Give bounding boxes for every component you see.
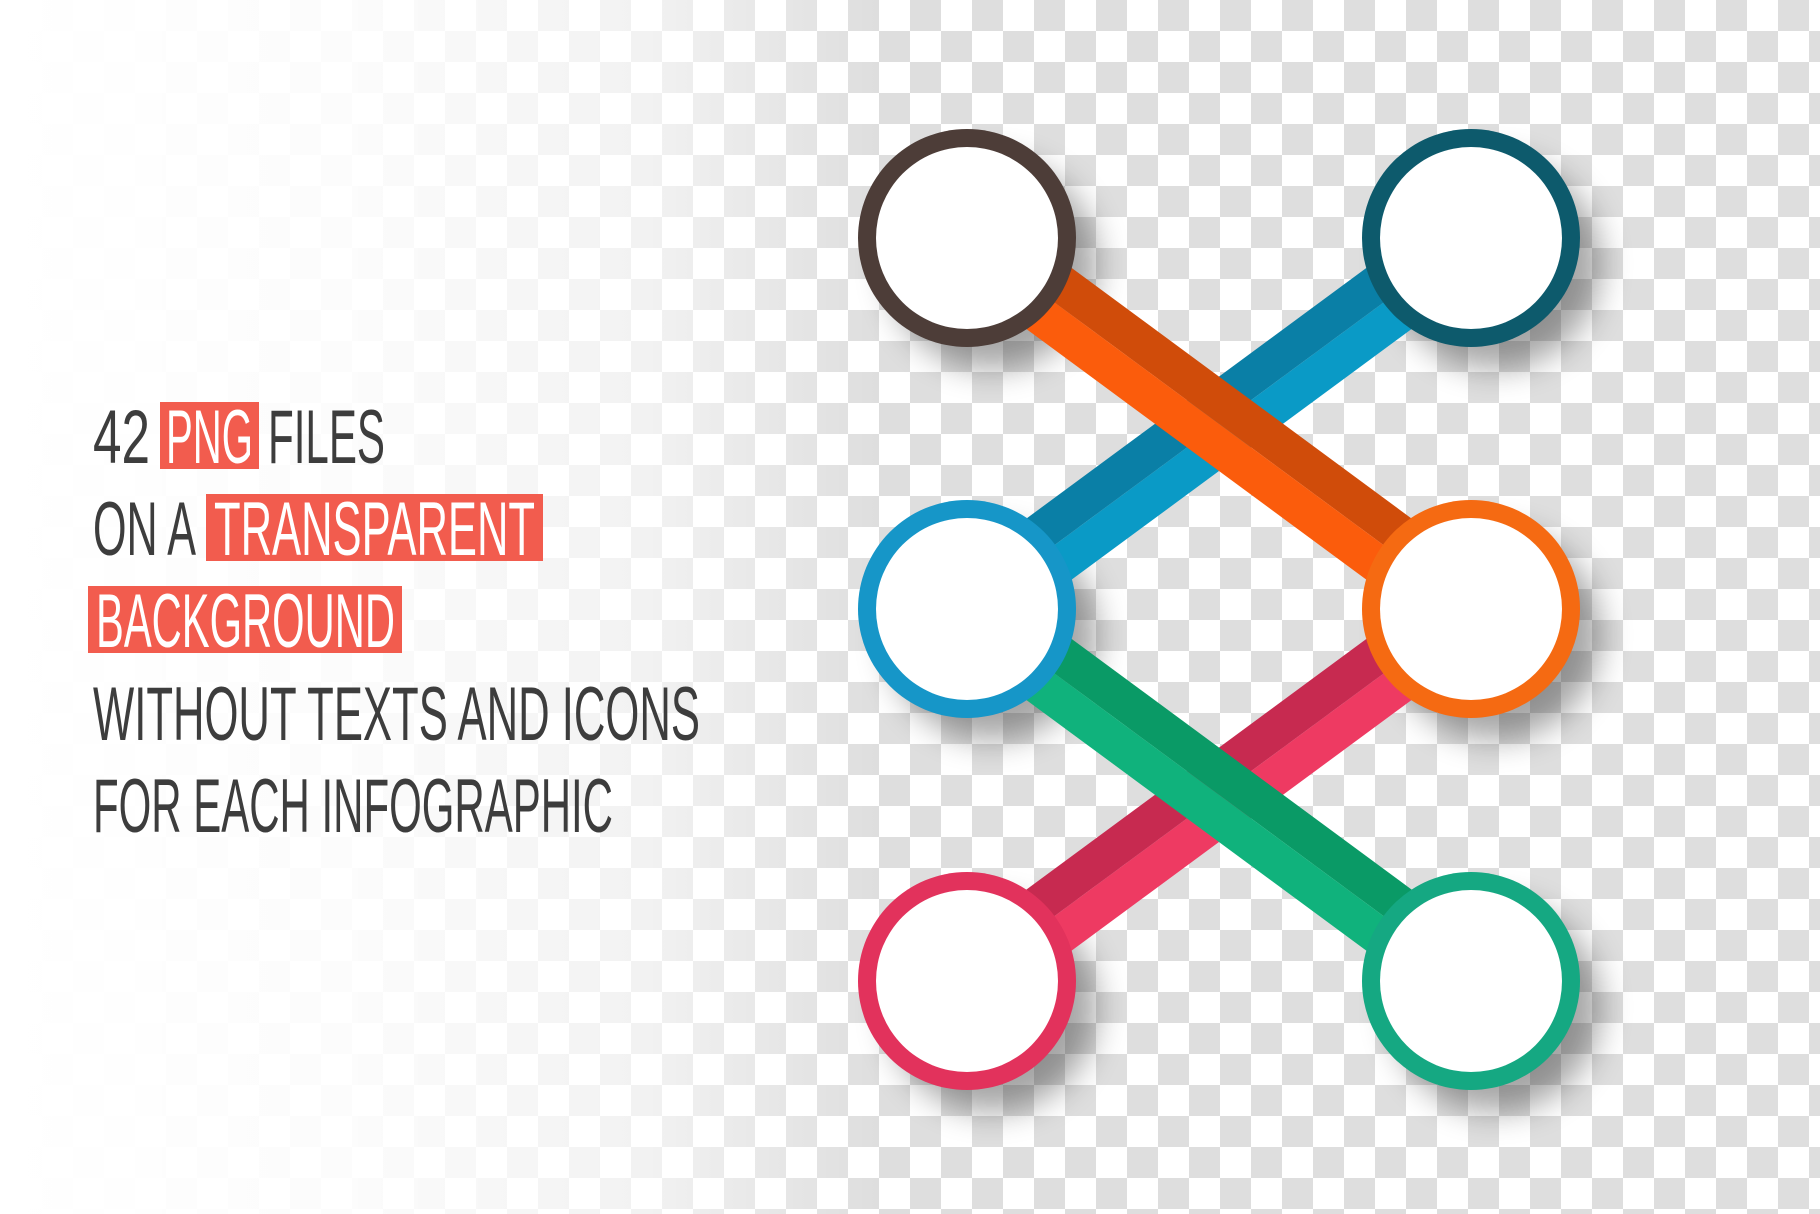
text block: headline: FILES — [268, 395, 385, 480]
circle: middle-right orange — [1362, 500, 1580, 718]
circle: bottom-right green — [1362, 872, 1580, 1090]
bar: orange — [944, 207, 1491, 638]
circle: top-left brown — [858, 129, 1076, 347]
highlight: TRANSPARENT — [206, 494, 543, 561]
text block: headline: BACKGROUND — [96, 579, 395, 664]
text block: headline: TRANSPARENT — [214, 487, 535, 572]
circle: middle-left blue — [858, 500, 1076, 718]
bar: green — [944, 578, 1491, 1009]
bar: pink — [947, 578, 1494, 1009]
highlight: BACKGROUND — [88, 586, 402, 653]
highlight: PNG — [160, 402, 259, 469]
text block: headline: WITHOUT TEXTS AND ICONS — [93, 672, 700, 757]
bar: blue — [947, 207, 1494, 638]
text block: headline: PNG — [166, 395, 253, 480]
shadows — [887, 159, 1601, 1112]
text block: headline: FOR EACH INFOGRAPHIC — [93, 764, 613, 849]
circle: bottom-left pink — [858, 872, 1076, 1090]
diagram — [858, 129, 1601, 1112]
circle: top-right teal — [1362, 129, 1580, 347]
text block: headline: ON A — [93, 487, 196, 572]
text block: headline: 42 — [93, 395, 150, 480]
text block: headline — [88, 395, 700, 849]
